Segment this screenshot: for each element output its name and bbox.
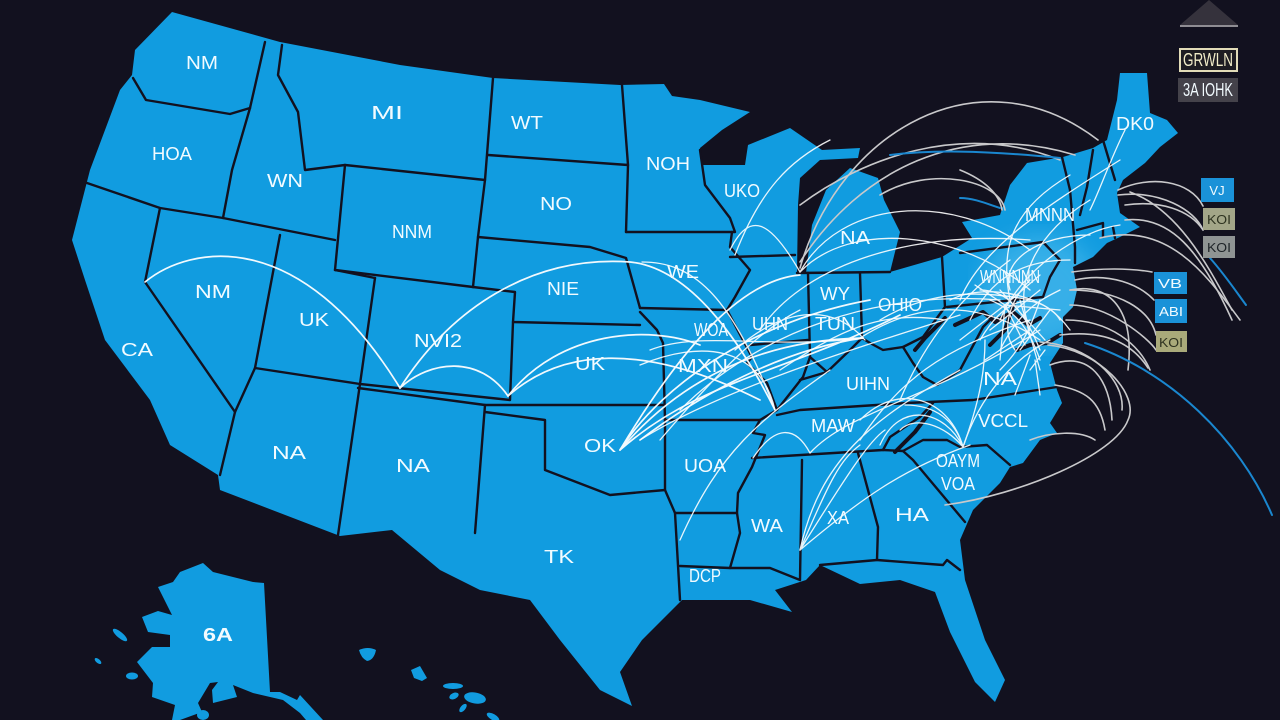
state labels: UKO [724, 181, 760, 201]
state labels: NVI2 [414, 331, 462, 351]
highlight: dense northeast glow [980, 235, 1100, 345]
legend: olive tag 2 [1156, 331, 1187, 352]
state labels: OK [584, 436, 616, 456]
legend: olive tag 1 [1203, 208, 1235, 230]
state labels: NO [540, 194, 572, 214]
islands: Aleutians and Hawaii [94, 627, 501, 720]
legend: grey tag: 3A IOHK [1183, 80, 1233, 100]
state labels: MI [371, 103, 403, 123]
state labels: WNNNNN [980, 267, 1040, 287]
legend: blue tag 1 [1201, 178, 1234, 202]
state labels: NM [186, 53, 218, 73]
state borders [87, 42, 1115, 600]
thick dark border scribbles near the Chesapeake [895, 300, 1060, 452]
state labels: NOH [646, 154, 690, 174]
state labels: WA [751, 516, 783, 536]
state labels: NA [840, 228, 870, 248]
state labels: WT [511, 113, 543, 133]
legend: blue tag 3: ABI [1159, 304, 1183, 319]
state labels: UHN [752, 314, 788, 334]
state labels: WE [667, 262, 699, 282]
state labels: XA [827, 508, 849, 528]
connection arcs over the northeast [950, 130, 1125, 395]
state labels: DK0 [1116, 114, 1154, 134]
state labels: NM [195, 282, 231, 302]
legend: grey tag 2: KOI [1207, 240, 1231, 255]
state labels: VOA [941, 474, 975, 494]
legend: triangle marker [1180, 0, 1238, 27]
state labels: HOA [152, 144, 192, 164]
state labels: NA [983, 369, 1017, 389]
state labels: OAYM [936, 451, 980, 471]
state labels: UIHN [846, 374, 890, 394]
state labels: WN [267, 171, 303, 191]
legend: blue tag 1: VJ [1209, 183, 1225, 198]
legend: olive tag 2: KOI [1159, 335, 1183, 350]
state labels: MAW [811, 416, 855, 436]
connection arcs over the midwest and south [640, 140, 1050, 550]
state labels: DCP [689, 566, 721, 586]
legend: cream tag: GRWLN [1183, 50, 1233, 70]
state labels: WOA [694, 320, 728, 340]
state labels: UK [575, 354, 605, 374]
Alaska [137, 563, 323, 720]
legend: grey tag 2 [1203, 236, 1235, 258]
connection arcs over the Atlantic [800, 102, 1240, 505]
state labels: HA [895, 505, 929, 525]
state labels: TK [544, 547, 574, 567]
state labels: CA [121, 340, 153, 360]
state labels: UK [299, 310, 329, 330]
connection arcs over the west [145, 256, 900, 450]
state labels: NIE [547, 279, 579, 299]
state labels: UOA [684, 456, 726, 476]
state labels: TUN [815, 314, 855, 334]
state labels: OHIO [878, 295, 922, 315]
legend: blue tag 3 [1155, 299, 1187, 323]
state labels [121, 53, 1154, 586]
legend: blue tag 2 [1154, 272, 1187, 294]
state labels: NA [396, 456, 430, 476]
state labels: MNNN [1025, 205, 1075, 225]
state labels: NNM [392, 222, 432, 242]
legend: blue tag 2: VB [1158, 276, 1182, 291]
legend: grey tag [1178, 78, 1238, 102]
label: Alaska: 6A [203, 625, 233, 645]
state labels: VCCL [978, 411, 1028, 431]
state labels: MXN [678, 356, 728, 376]
state labels: NA [272, 443, 306, 463]
legend: olive tag 1: KOI [1207, 212, 1231, 227]
state labels: WY [820, 284, 850, 304]
blue arcs over the Atlantic [890, 152, 1272, 515]
